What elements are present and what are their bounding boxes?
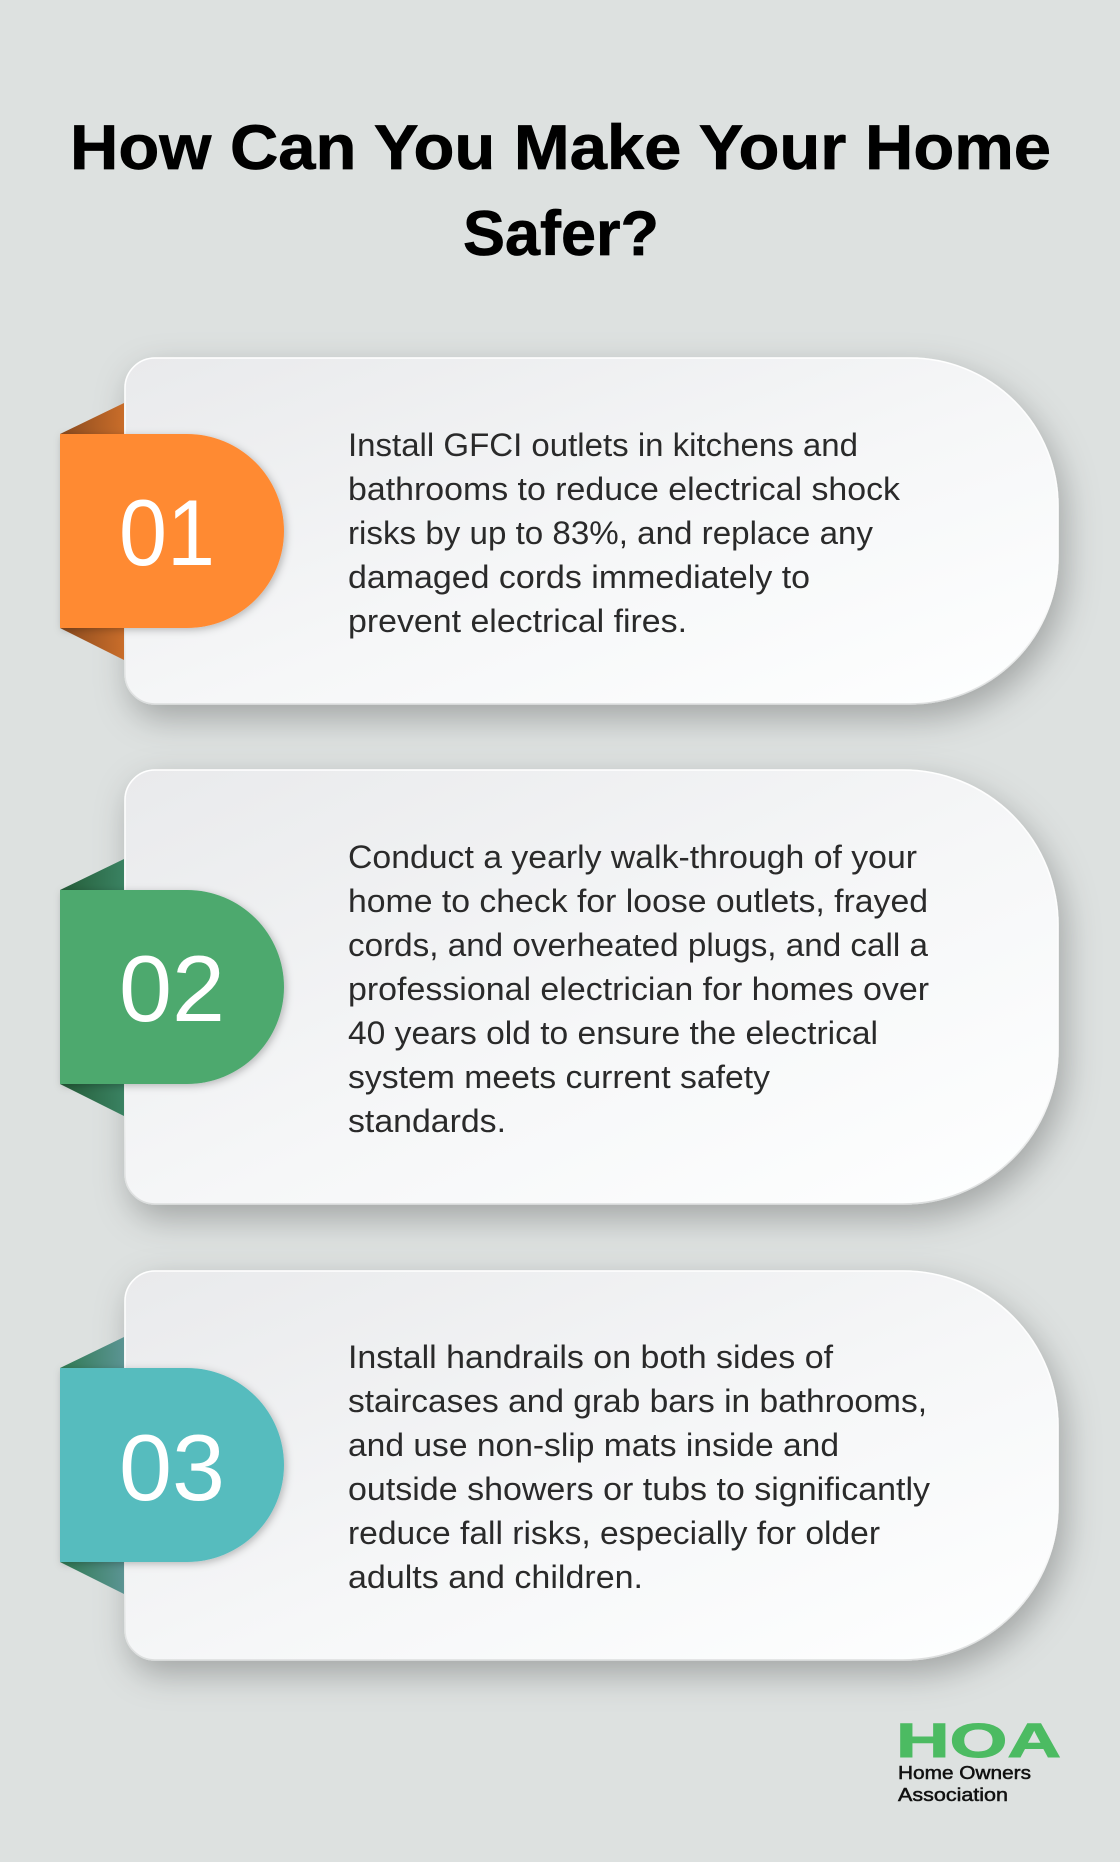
number badge 01 bbox=[60, 434, 284, 628]
text: step 03: reduce fall risks, especially for older bbox=[348, 1515, 880, 1551]
number badge 03 bbox=[60, 1368, 284, 1562]
card 02 background bbox=[125, 770, 1058, 1204]
text: step 02: Conduct a yearly walk-through of your bbox=[348, 839, 917, 875]
text: step 01: risks by up to 83%, and replace any bbox=[348, 515, 873, 551]
title: Safer? bbox=[463, 199, 659, 269]
title bbox=[70, 113, 1051, 269]
text: step 03: staircases and grab bars in bathrooms, bbox=[348, 1383, 927, 1419]
ribbon fold top bbox=[60, 859, 124, 890]
logo: HOA Home Owners Association: Home Owners bbox=[898, 1763, 1031, 1783]
text: step 02: cords, and overheated plugs, and call a bbox=[348, 927, 928, 963]
text: step 01: prevent electrical fires. bbox=[348, 603, 687, 639]
number 02: 02 bbox=[119, 936, 225, 1041]
text: step 03: Install handrails on both sides of bbox=[348, 1339, 833, 1375]
text: step 02: home to check for loose outlets, frayed bbox=[348, 883, 928, 919]
ribbon fold bottom bbox=[60, 1562, 124, 1594]
text: step 02: professional electrician for homes over bbox=[348, 971, 929, 1007]
logo: HOA Home Owners Association: HOA bbox=[896, 1715, 1061, 1768]
text: step 02: 40 years old to ensure the electrical bbox=[348, 1015, 878, 1051]
card 01 background bbox=[125, 358, 1058, 704]
ribbon fold top bbox=[60, 1337, 124, 1368]
number badge 02 bbox=[60, 890, 284, 1084]
panel: step 03 bbox=[60, 1271, 1058, 1660]
ribbon fold bottom bbox=[60, 1084, 124, 1116]
ribbon fold top bbox=[60, 403, 124, 434]
logo: HOA Home Owners Association bbox=[896, 1715, 1061, 1805]
card 03 background bbox=[125, 1271, 1058, 1660]
title: How Can You Make Your Home bbox=[70, 113, 1051, 183]
text: step 03: and use non-slip mats inside and bbox=[348, 1427, 839, 1463]
text: step 03: outside showers or tubs to significantly bbox=[348, 1471, 930, 1507]
panel: step 01 bbox=[60, 358, 1058, 704]
ribbon fold bottom bbox=[60, 628, 124, 660]
text: step 02: system meets current safety bbox=[348, 1059, 770, 1095]
text: step 01 bbox=[348, 427, 901, 639]
text: step 02: standards. bbox=[348, 1103, 506, 1139]
number 01: 01 bbox=[119, 480, 215, 585]
text: step 03 bbox=[348, 1339, 930, 1595]
number 03: 03 bbox=[119, 1415, 225, 1520]
text: step 01: bathrooms to reduce electrical shock bbox=[348, 471, 901, 507]
text: step 02 bbox=[348, 839, 929, 1139]
panel: step 02 bbox=[60, 770, 1058, 1204]
logo: HOA Home Owners Association: Association bbox=[898, 1785, 1008, 1805]
text: step 03: adults and children. bbox=[348, 1559, 643, 1595]
text: step 01: damaged cords immediately to bbox=[348, 559, 810, 595]
text: step 01: Install GFCI outlets in kitchens and bbox=[348, 427, 858, 463]
